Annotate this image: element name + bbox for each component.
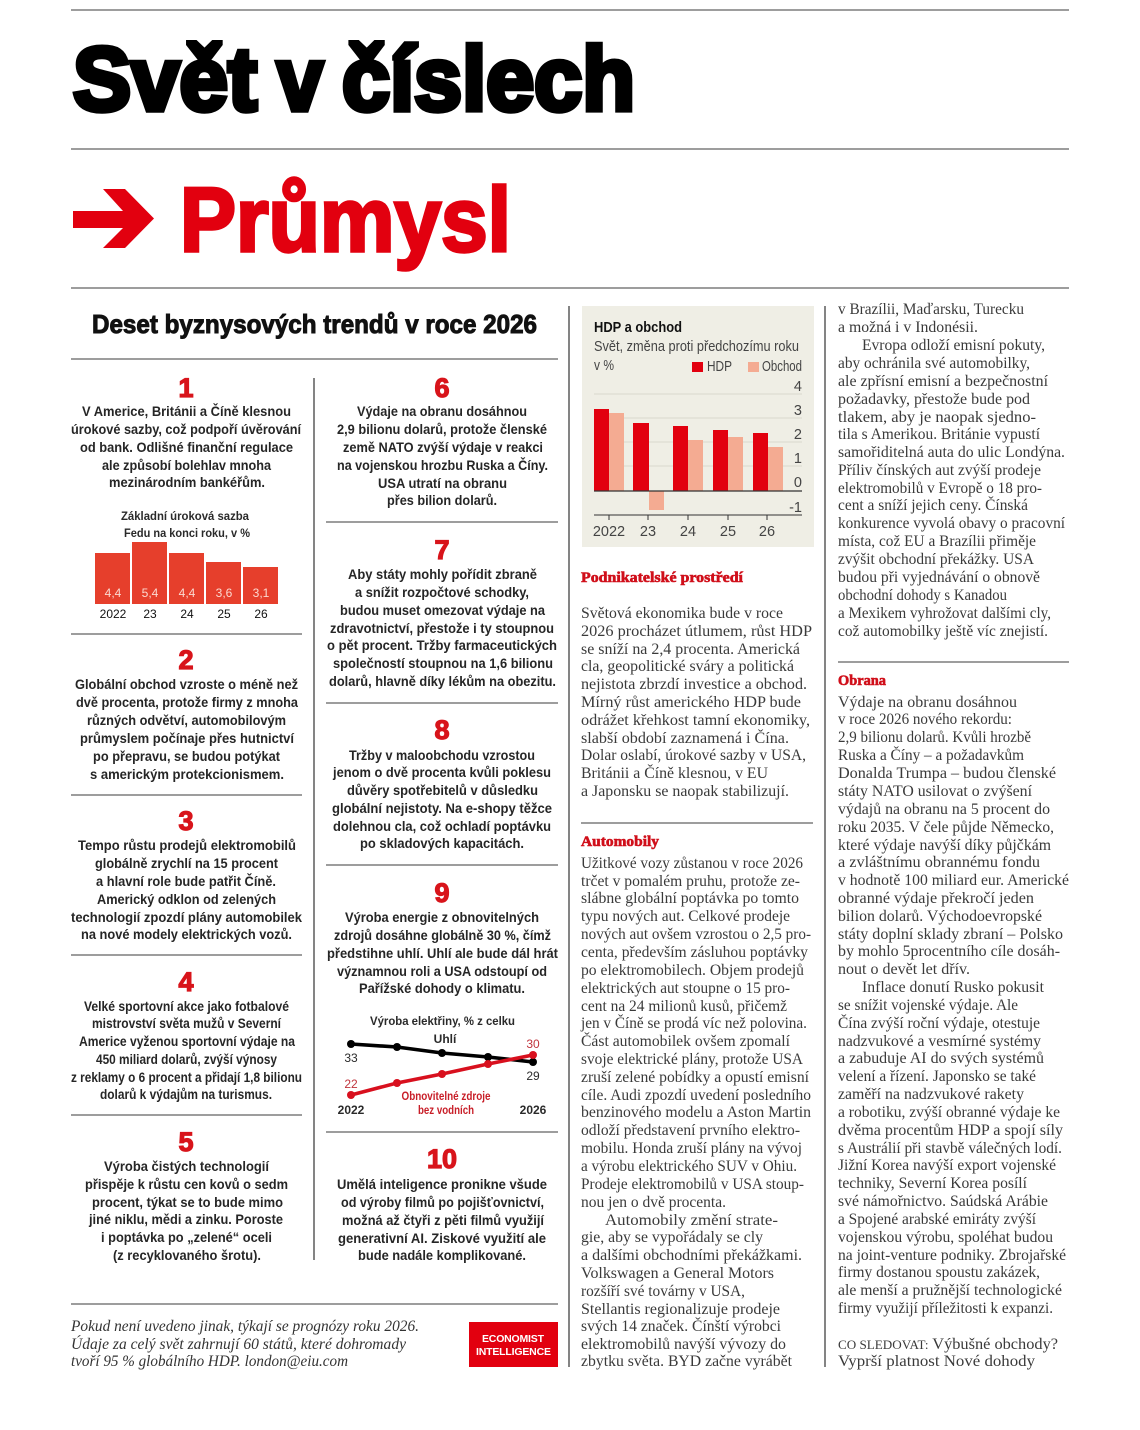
trend 5: procent, týkat se to bude mimo bbox=[92, 1194, 283, 1210]
trend 10: bude nadále komplikované. bbox=[358, 1247, 526, 1263]
panel: ten business trends bbox=[71, 373, 558, 1263]
trend 3: globálně zrychlí na 15 procent bbox=[95, 855, 278, 871]
trend 6: země NATO zvýší výdaje v reakci bbox=[343, 439, 543, 455]
text block: cars continued bbox=[838, 301, 1066, 640]
text block: cars: slábne globální poptávka po tomto bbox=[581, 890, 799, 907]
trend 2 bbox=[75, 645, 298, 782]
chart panel: GDP and trade: 25 bbox=[720, 524, 736, 540]
bar chart: Fed base rate: 24 bbox=[180, 607, 194, 621]
trend 4: Americe vyženou sportovní výdaje na bbox=[79, 1033, 295, 1049]
text block: defence: Vyprší platnost Nové dohody bbox=[838, 1353, 1035, 1370]
text block: defence: státy NATO usilovat o zvýšení bbox=[838, 783, 1033, 800]
footnote: tvoří 95 % globálního HDP. london@eiu.com bbox=[71, 1353, 348, 1370]
text block: cars continued: elektromobilů v Evropě o 18 pro- bbox=[838, 480, 1042, 497]
trend 9: 9 bbox=[434, 878, 450, 908]
text block: cars: nových aut ovšem vzrostou o 2,5 pro- bbox=[581, 926, 811, 943]
trend 5 bbox=[85, 1127, 288, 1263]
text block: cars continued: tlakem, aby je naopak sjedno- bbox=[838, 409, 1036, 426]
text block: defence: roku 2035. V čele půjde Německo, bbox=[838, 819, 1054, 836]
text block: cars: a výrobu elektrického SUV v Ohiu. bbox=[581, 1158, 797, 1175]
trend 5: Výroba čistých technologií bbox=[104, 1158, 270, 1174]
trend 8: jenom o dvě procenta kvůli poklesu bbox=[332, 764, 551, 780]
text block: defence: se snížit vojenské výdaje. Ale bbox=[838, 997, 1018, 1014]
chart panel: GDP and trade: 0 bbox=[794, 475, 802, 491]
text block: cars: cíle. Audi zpozdí uvedení posledního bbox=[581, 1087, 811, 1104]
subheading: Deset byznysových trendů v roce 2026 bbox=[92, 309, 537, 339]
trend 9: Výroba energie z obnovitelných bbox=[345, 909, 539, 925]
text block: cars continued: zvýšit obchodní překážky. USA bbox=[838, 551, 1035, 568]
logo: Economist Intelligence: INTELLIGENCE bbox=[476, 1346, 551, 1358]
trend 7: budou muset omezovat výdaje na bbox=[340, 602, 545, 618]
trend 2: 2 bbox=[178, 645, 194, 675]
text block: cars: svých 14 značek. Čínští výrobci bbox=[581, 1318, 782, 1335]
trend 8 bbox=[332, 715, 552, 851]
line chart: electricity production: 2022 bbox=[338, 1103, 365, 1117]
trend 10: Umělá inteligence pronikne všude bbox=[337, 1176, 547, 1192]
line chart: electricity production: 30 bbox=[526, 1037, 540, 1051]
text block: cars: Volkswagen a General Motors bbox=[581, 1265, 774, 1282]
text block: defence: a zvláštnímu obrannému fondu bbox=[838, 854, 1040, 871]
chart panel: GDP and trade: Svět, změna proti předchozímu roku bbox=[594, 339, 799, 355]
line chart: electricity production: Výroba elektřiny, % z celku bbox=[370, 1014, 515, 1028]
footnote bbox=[70, 1318, 419, 1370]
text block: cars continued: Příliv čínských aut zvýší prodeje bbox=[838, 462, 1041, 479]
trend 8: Tržby v maloobchodu vzrostou bbox=[349, 747, 535, 763]
trend 4: mistrovství světa mužů v Severní bbox=[92, 1015, 282, 1031]
bar chart: Fed base rate: 3,1 bbox=[253, 586, 270, 600]
bar chart: Fed base rate: 4,4 bbox=[105, 586, 122, 600]
text block: defence: své námořnictvo. Saúdská Arábie bbox=[838, 1193, 1048, 1210]
text block: defence: firmy dostanou spoustu zakázek, bbox=[838, 1264, 1040, 1281]
text block: cars: elektromobilů navýší vývozy do bbox=[581, 1336, 786, 1353]
trend 3: a hlavní role bude patřit Číně. bbox=[96, 872, 276, 889]
trend 8: po skladových kapacitách. bbox=[360, 835, 524, 851]
text block: cars: Prodeje elektromobilů v USA stoup- bbox=[581, 1176, 804, 1193]
trend 6 bbox=[337, 373, 548, 508]
trend 2: dvě procenta, protože firmy z mnoha bbox=[76, 694, 298, 710]
text block: business environment: Světová ekonomika bude v roce bbox=[581, 605, 783, 622]
trend 8: globální nejistoty. Na e-shopy těžce bbox=[332, 800, 552, 816]
trend 3: Tempo růstu prodejů elektromobilů bbox=[78, 837, 296, 853]
text block: defence: velení a řízení. Japonsko se také bbox=[838, 1068, 1036, 1085]
trend 9: předstihne uhlí. Uhlí ale bude dál hrát bbox=[327, 945, 558, 961]
chart panel: GDP and trade: 3 bbox=[794, 403, 802, 419]
bar chart: Fed base rate: Fedu na konci roku, v % bbox=[124, 526, 250, 540]
text block: cars: zbytku světa. BYD začne vyrábět bbox=[581, 1353, 793, 1370]
text block: defence: by mohlo 5procentního cíle dosáh- bbox=[838, 943, 1060, 960]
trend 4: dolarů k výdajům na turismus. bbox=[100, 1086, 272, 1102]
trend 5: přispěje k růstu cen kovů o sedm bbox=[85, 1176, 288, 1192]
trend 7: dolarů, hlavně díky lékům na obezitu. bbox=[329, 673, 556, 689]
trend 1: od bank. Odlišné finanční regulace bbox=[80, 439, 293, 455]
trend 4: 450 miliard dolarů, zvýší výnosy bbox=[96, 1051, 277, 1067]
chart panel: GDP and trade: Obchod bbox=[762, 359, 802, 375]
trend 1: mezinárodním bankéřům. bbox=[109, 474, 265, 490]
text block: cars: jen v Číně se prodá víc než polovina. bbox=[580, 1015, 807, 1032]
trend 5: 5 bbox=[178, 1127, 194, 1157]
trend 8: důvěry spotřebitelů v důsledku bbox=[347, 782, 538, 798]
trend 2: různých odvětví, automobilovým bbox=[87, 712, 286, 728]
text block: cars: elektrických aut stoupne o 15 pro- bbox=[581, 980, 790, 997]
text block: business environment: slabší období zaznamená i Čína. bbox=[581, 730, 789, 747]
chart panel: GDP and trade: 23 bbox=[640, 524, 656, 540]
text block: cars continued: požadavky, přestože bude pod bbox=[838, 391, 1030, 408]
text block: defence: výdajů na obranu na 5 procent do bbox=[838, 801, 1050, 818]
text block: cars: a dalšími obchodními překážkami. bbox=[581, 1247, 802, 1264]
trend 2: s americkým protekcionismem. bbox=[90, 766, 284, 782]
text block: cars: zruší zelené pobídky a opustí emisní bbox=[581, 1069, 810, 1086]
text block: business environment: odrážet křehkost tamní ekonomiky, bbox=[581, 712, 810, 729]
line chart: electricity production: Obnovitelné zdroje bbox=[402, 1089, 491, 1103]
text block: defence: a Spojené arabské emiráty zvýší bbox=[838, 1211, 1037, 1228]
text block: cars continued: v Brazílii, Maďarsku, Turecku bbox=[838, 301, 1024, 318]
trend 10: možná až čtyři z pěti filmů využijí bbox=[342, 1212, 545, 1228]
chart panel: GDP and trade: 26 bbox=[759, 524, 775, 540]
chart panel: GDP and trade: 1 bbox=[794, 451, 802, 467]
footnote: Údaje za celý svět zahrnují 60 států, které dohromady bbox=[71, 1336, 406, 1353]
bar chart: Fed base rate: 25 bbox=[217, 607, 231, 621]
line chart: electricity production bbox=[338, 1014, 547, 1117]
trend 7: zdravotnictví, přestože i ty stoupnou bbox=[330, 620, 554, 636]
text block: defence: dvěma procentům HDP a spojí síly bbox=[838, 1122, 1063, 1139]
chart panel: GDP and trade: v % bbox=[594, 358, 614, 374]
bar chart: Fed base rate bbox=[95, 509, 278, 621]
text block: defence: Inflace donutí Rusko pokusit bbox=[862, 979, 1045, 996]
trend 2: Globální obchod vzroste o méně než bbox=[75, 676, 298, 692]
text block: cars: rozšíří své továrny v USA, bbox=[581, 1283, 745, 1300]
bar chart: Fed base rate: 23 bbox=[143, 607, 157, 621]
trend 2: po přepravu, se budou potýkat bbox=[93, 748, 280, 764]
text block: cars: mobilu. Honda zruší plány na vývoj bbox=[581, 1140, 802, 1157]
text block: business environment: nejistota zbrzdí investice a obchod. bbox=[581, 676, 807, 693]
trend 6: 6 bbox=[434, 373, 450, 403]
text block: defence: a zabuduje AI do svých systémů bbox=[838, 1050, 1044, 1067]
section heading: Průmysl bbox=[180, 170, 511, 271]
text block: cars: nou jen o dvě procenta. bbox=[581, 1194, 726, 1211]
trend 4: z reklamy o 6 procent a přidají 1,8 bilionu bbox=[71, 1069, 302, 1085]
trend 10: generativní AI. Ziskové využití ale bbox=[338, 1230, 546, 1246]
trend 1: úrokové sazby, což podpoří úvěrování bbox=[71, 421, 302, 437]
text block: defence: nout o devět let dřív. bbox=[838, 961, 970, 978]
text block: defence: 2,9 bilionu dolarů. Kvůli hrozbě bbox=[838, 729, 1031, 746]
text block: defence: Výdaje na obranu dosáhnou bbox=[838, 694, 1017, 711]
text block: business environment: 2026 procházet útlumem, růst HDP bbox=[581, 623, 812, 640]
bar chart: Fed base rate: 3,6 bbox=[216, 586, 233, 600]
text block: cars: po elektromobilech. Objem prodejů bbox=[581, 962, 804, 979]
bar chart: Fed base rate: 5,4 bbox=[142, 586, 159, 600]
text block: cars continued: místa, což EU a Brazílii přiměje bbox=[838, 533, 1036, 550]
logo: Economist Intelligence bbox=[469, 1322, 558, 1367]
line chart: electricity production: 29 bbox=[526, 1069, 540, 1083]
trend 8: dolehnou cla, což ochladí poptávku bbox=[333, 818, 551, 834]
bar chart: Fed base rate: 4,4 bbox=[179, 586, 196, 600]
trend 5: (z recyklovaného šrotu). bbox=[113, 1247, 261, 1263]
text block: cars: Část automobilek ovšem zpomalí bbox=[581, 1033, 791, 1050]
text block: cars: odloží představení prvního elektro- bbox=[581, 1122, 800, 1139]
heading: business environment: Podnikatelské prostředí bbox=[581, 570, 744, 586]
title: v bbox=[277, 30, 323, 130]
trend 10 bbox=[337, 1144, 547, 1263]
text block: defence: bilion dolarů. Východoevropské bbox=[838, 908, 1042, 925]
chart panel: GDP and trade: 24 bbox=[680, 524, 696, 540]
chart panel: GDP and trade: 2 bbox=[794, 427, 802, 443]
trend 6: přes bilion dolarů. bbox=[387, 492, 497, 508]
chart panel: GDP and trade: HDP bbox=[707, 359, 732, 375]
text block: cars continued: samořiditelná auta do ulic Londýna. bbox=[838, 444, 1065, 461]
bar chart: Fed base rate: Základní úroková sazba bbox=[121, 509, 249, 523]
chart panel: GDP and trade: 4 bbox=[794, 379, 802, 395]
text block: defence: Ruska a Číny – a požadavkům bbox=[838, 747, 1024, 764]
trend 9: významnou roli a USA odstoupí od bbox=[337, 963, 547, 979]
bar chart: Fed base rate: 2022 bbox=[100, 607, 127, 621]
trend 8: 8 bbox=[434, 715, 450, 745]
line chart: electricity production: 33 bbox=[344, 1051, 358, 1065]
text block: business environment: Mírný růst amerického HDP bude bbox=[581, 694, 801, 711]
icon: red arrow bbox=[73, 189, 154, 248]
text block: defence: a robotiku, zvýší obranné výdaje ke bbox=[838, 1104, 1060, 1121]
line chart: electricity production: bez vodních bbox=[418, 1103, 474, 1117]
text block: cars: trčet v pomalém pruhu, protože ze- bbox=[581, 873, 800, 890]
trend 6: 2,9 bilionu dolarů, protože členské bbox=[337, 421, 547, 437]
text block: defence: vojenskou výrobu, spoléhat budou bbox=[838, 1229, 1053, 1246]
text block: defence: firmy využijí příležitosti k expanzi. bbox=[838, 1300, 1053, 1317]
text block: defence: techniky, Severní Korea posílí bbox=[838, 1175, 1028, 1192]
trend 7: Aby státy mohly pořídit zbraně bbox=[348, 566, 537, 582]
text block: cars: cent na 24 milionů kusů, přičemž bbox=[581, 998, 787, 1015]
trend 4: 4 bbox=[178, 967, 194, 997]
footnote: Pokud není uvedeno jinak, týkají se prognózy roku 2026. bbox=[70, 1318, 419, 1335]
text block: cars: svoje elektrické plány, protože USA bbox=[581, 1051, 804, 1068]
text block: defence: s Austrálií při stavbě válečných lodí. bbox=[838, 1140, 1062, 1157]
trend 7: o pět procent. Tržby farmaceutických bbox=[327, 637, 557, 653]
trend 1: ale způsobí bolehlav mnoha bbox=[102, 457, 271, 473]
bar chart: Fed base rate: 26 bbox=[254, 607, 268, 621]
text block: defence bbox=[838, 694, 1069, 1370]
logo: Economist Intelligence: ECONOMIST bbox=[482, 1333, 545, 1345]
trend 6: Výdaje na obranu dosáhnou bbox=[357, 403, 527, 419]
text block: cars continued: budou při vyjednávání o obnově bbox=[838, 569, 1040, 586]
text block: defence: Jižní Korea navýší export vojenské bbox=[838, 1157, 1056, 1174]
trend 3: 3 bbox=[178, 806, 194, 836]
trend 2: průmyslem počínaje přes hutnictví bbox=[80, 730, 295, 746]
trend 10: od výroby filmů po pojišťovnictví, bbox=[341, 1194, 544, 1210]
text block: cars: typu nových aut. Celkové prodeje bbox=[581, 908, 790, 925]
text block: defence: na joint-venture podniky. Zbrojařské bbox=[838, 1247, 1066, 1264]
text block: defence: zaměří na nadzvukové rakety bbox=[838, 1086, 1024, 1103]
trend 4 bbox=[71, 967, 302, 1102]
chart panel: GDP and trade: HDP a obchod bbox=[594, 320, 682, 336]
trend 1 bbox=[71, 373, 302, 490]
trend 3: na nové modely elektrických vozů. bbox=[81, 926, 292, 942]
trend 9: zdrojů dosáhne globálně 30 %, čímž bbox=[334, 927, 551, 943]
text block: cars: Užitkové vozy zůstanou v roce 2026 bbox=[581, 855, 803, 872]
line chart: electricity production: 22 bbox=[344, 1077, 358, 1091]
text block: cars continued: Evropa odloží emisní pokuty, bbox=[862, 337, 1045, 354]
text block: defence: v roce 2026 nového rekordu: bbox=[838, 711, 1012, 728]
text block: cars: Automobily změní strate- bbox=[605, 1212, 778, 1229]
title bbox=[73, 30, 635, 130]
trend 1: 1 bbox=[178, 373, 194, 403]
trend 3 bbox=[71, 806, 302, 942]
trend 1: V Americe, Británii a Číně klesnou bbox=[82, 402, 291, 419]
title: Svět bbox=[73, 30, 257, 130]
text block: defence: státy doplní sklady zbraní – Polsko bbox=[838, 926, 1063, 943]
text block: cars continued: tila s Amerikou. Británie vypustí bbox=[838, 426, 1041, 443]
trend 5: i poptávka po „zelené“ oceli bbox=[101, 1229, 272, 1245]
line chart: electricity production: 2026 bbox=[520, 1103, 547, 1117]
text block: cars continued: aby ochránila své automobilky, bbox=[838, 355, 1030, 372]
trend 6: USA utratí na obranu bbox=[378, 475, 507, 491]
trend 7 bbox=[327, 535, 557, 689]
heading: cars: Automobily bbox=[581, 834, 660, 850]
text block: business environment: se sníží na 2,4 procenta. Americká bbox=[581, 641, 800, 658]
text block: defence: Čína zvýší roční výdaje, otestuje bbox=[838, 1015, 1040, 1032]
text block: defence: které výdaje navýší díky půjčkám bbox=[838, 837, 1051, 854]
text block: business environment: a Japonsku se naopak stabilizují. bbox=[581, 783, 789, 800]
text block: defence: CO SLEDOVAT: Výbušné obchody? bbox=[838, 1336, 1058, 1353]
text block: cars: Stellantis regionalizuje prodeje bbox=[581, 1301, 780, 1318]
text block: cars continued: což automobilky ještě víc znejistí. bbox=[838, 623, 1048, 640]
trend 3: technologií zpozdí plány automobilek bbox=[71, 909, 302, 925]
text block: business environment: cla, geopolitické sváry a politická bbox=[581, 658, 794, 675]
chart panel: GDP and trade bbox=[582, 306, 814, 547]
chart panel: GDP and trade: -1 bbox=[789, 500, 802, 516]
text block: business environment: Británii a Číně klesnou, v EU bbox=[581, 765, 768, 782]
text block: defence: nadzvukové a vesmírné systémy bbox=[838, 1033, 1041, 1050]
chart panel: GDP and trade: 2022 bbox=[593, 524, 625, 540]
text block: business environment bbox=[581, 605, 812, 800]
text block: defence: ale menší a pružnější technologické bbox=[838, 1282, 1062, 1299]
text block: cars: benzinového modelu a Aston Martin bbox=[581, 1104, 811, 1121]
text block: defence: obranné výdaje překročí jeden bbox=[838, 890, 1034, 907]
text block: cars continued: obchodní dohody s Kanadou bbox=[838, 587, 1007, 604]
trend 7: 7 bbox=[434, 535, 450, 565]
trend 9 bbox=[327, 878, 558, 996]
trend 5: jiné niklu, mědi a zinku. Poroste bbox=[88, 1211, 283, 1227]
trend 10: 10 bbox=[427, 1144, 457, 1174]
text block: cars continued: a Mexikem vyhrožovat dalšími cly, bbox=[838, 605, 1051, 622]
text block: cars bbox=[580, 855, 811, 1370]
text block: cars continued: ale zpřísní emisní a bezpečnostní bbox=[838, 373, 1049, 390]
text block: cars continued: a možná i v Indonésii. bbox=[838, 319, 978, 336]
trend 3: Americký odklon od zelených bbox=[97, 891, 276, 907]
trend 9: Pařížské dohody o klimatu. bbox=[359, 980, 525, 996]
trend 4: Velké sportovní akce jako fotbalové bbox=[84, 998, 289, 1014]
text block: cars continued: konkurence vyvolá obavy o pracovní bbox=[838, 515, 1066, 532]
line chart: electricity production: Uhlí bbox=[434, 1032, 457, 1046]
text block: cars: gie, aby se vypořádaly se cly bbox=[581, 1229, 763, 1246]
text block: defence: Donalda Trumpa – budou členské bbox=[838, 765, 1056, 782]
text block: cars continued: cent a sníží jejich ceny. Čínská bbox=[838, 497, 1028, 514]
trend 7: a snížit rozpočtové schodky, bbox=[355, 584, 529, 600]
text block: cars: centa, především zásluhou poptávky bbox=[581, 944, 808, 961]
text block: business environment: Dolar oslabí, úrokové sazby v USA, bbox=[581, 747, 806, 764]
text block: defence: v hodnotě 100 miliard eur. Americké bbox=[838, 872, 1069, 889]
heading: defence: Obrana bbox=[838, 673, 887, 689]
trend 6: na vojenskou hrozbu Ruska a Číny. bbox=[337, 456, 548, 473]
title: číslech bbox=[342, 30, 635, 130]
trend 7: společností stoupnou na 1,6 bilionu bbox=[333, 655, 553, 671]
